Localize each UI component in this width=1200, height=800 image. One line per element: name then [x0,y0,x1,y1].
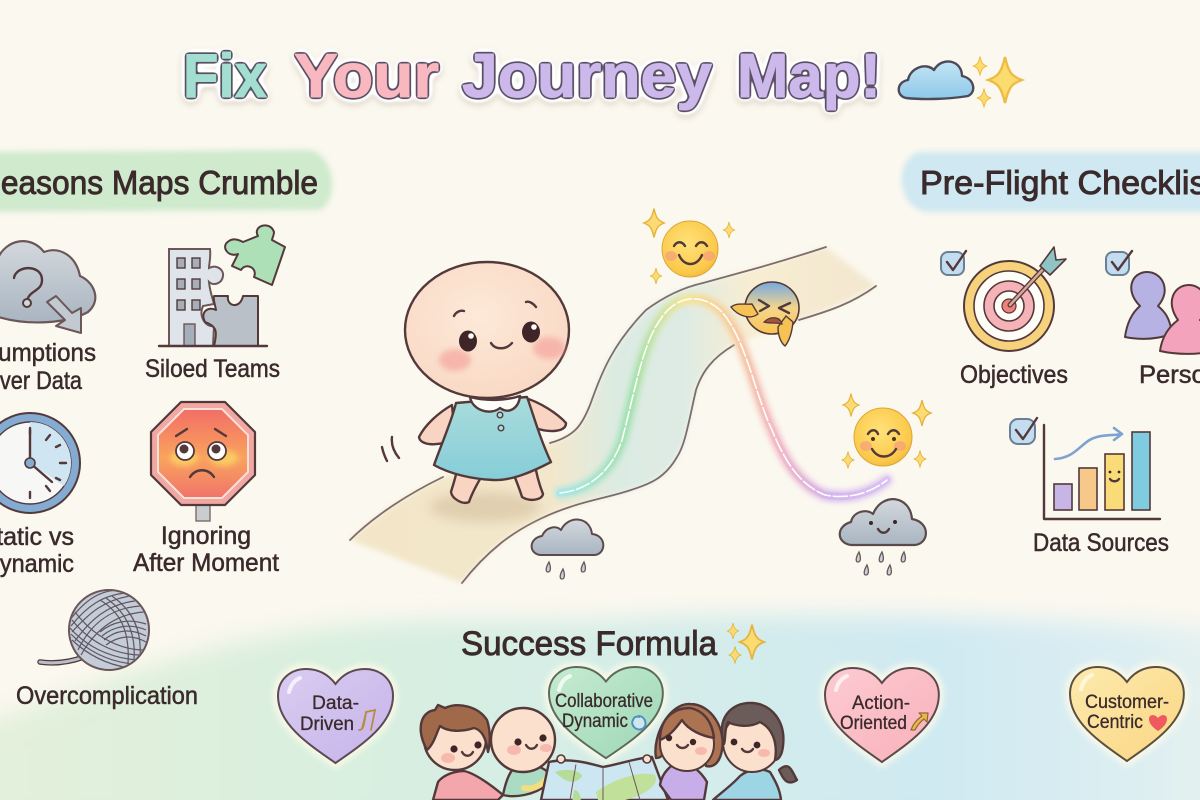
heart: data-driven: Driven [300,714,354,735]
kid: baby [491,708,555,796]
icon: heading sparkles [727,623,764,664]
heart: collaborative dynamic [549,667,663,758]
rainbow journey line [560,299,887,497]
item: objectives: Objectives [960,361,1068,389]
icon: smiling rain cloud [840,499,926,575]
icon: small rain cloud [532,520,603,579]
character: baby walking [382,262,569,522]
item: personas [1106,251,1200,389]
item: data sources bar chart [1010,418,1169,557]
kids around the map [421,703,797,800]
kid: dark-haired girl [713,703,797,800]
title: Fix Your Journey Map!: Fix [183,42,267,111]
heart: action-oriented: Oriented [840,713,907,734]
heart: data-driven [278,669,393,763]
panel: journey illustration [350,208,931,583]
icon: upset face [731,282,799,346]
item: ignoring after moment [133,402,279,577]
panel: success formula [278,623,1184,800]
icon: happy face top [644,208,735,284]
icon: title cloud and sparkles [899,56,1022,108]
panel: pre-flight checklist [902,152,1200,557]
item: ignoring after moment: After Moment [133,549,279,577]
title: Fix Your Journey Map! [183,42,881,111]
item: ignoring after moment: Ignoring [161,522,251,550]
title: Fix Your Journey Map!: Journey [462,42,713,111]
heart: collaborative dynamic: Collaborative [555,691,653,712]
item: objectives [941,247,1068,389]
item: data sources bar chart: Data Sources [1033,529,1169,557]
item: siloed teams: Siloed Teams [145,355,280,383]
heart: data-driven: Data- [312,693,359,714]
item: assumptions over data [0,241,96,395]
heading band: checklist [902,152,1200,212]
panel: reasons maps crumble [0,150,332,710]
heading: success formula: Success Formula [461,625,717,663]
heart: action-oriented [825,668,939,762]
heart: customer-centric: Customer- [1085,692,1169,713]
formula background wash [0,615,1200,800]
item: overcomplication [16,590,198,710]
journey road [350,247,876,583]
heart: customer-centric: Centric [1087,712,1143,733]
icon: world map [541,755,668,800]
item: siloed teams [145,225,285,383]
kid: boy [421,705,503,800]
heart: collaborative dynamic: Dynamic [562,711,628,732]
kid: brunette girl [655,704,723,800]
item: static vs dynamic [0,413,80,578]
title: Fix Your Journey Map!: Your [294,42,439,111]
title: Fix Your Journey Map!: Map! [737,42,881,111]
heart: customer-centric [1070,667,1184,761]
item: overcomplication: Overcomplication [16,682,198,710]
heading band: reasons [0,150,332,212]
icon: happy face bottom [842,394,931,468]
heart: action-oriented: Action- [852,693,910,714]
heading band: checklist: Pre-Flight Checklist [920,164,1200,201]
